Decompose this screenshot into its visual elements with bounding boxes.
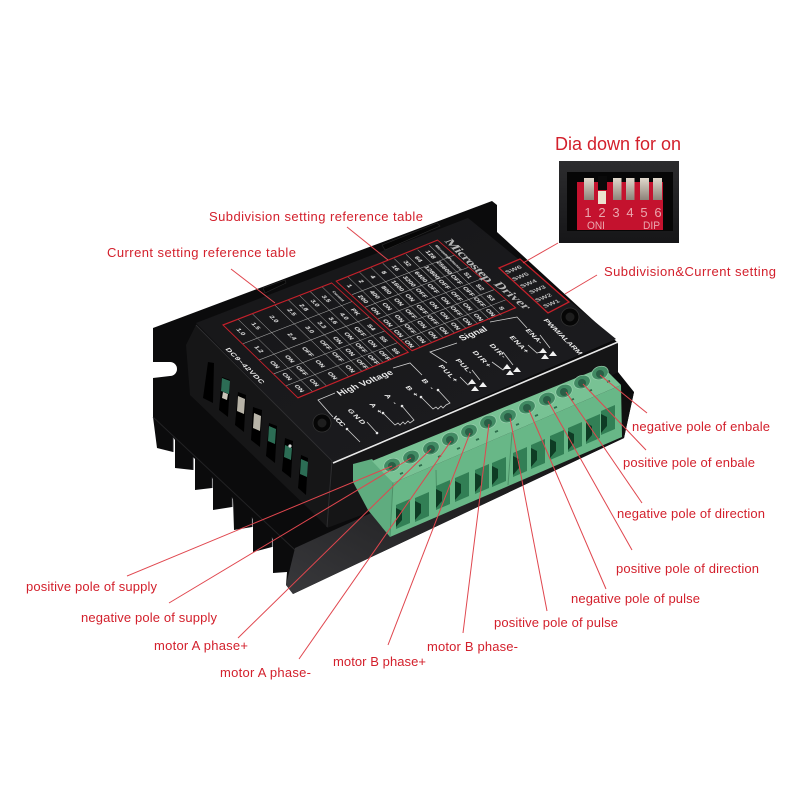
inset switch body [577, 182, 663, 230]
subdivision table values: 400 [367, 290, 381, 300]
subdivision table values: 6400 [413, 271, 428, 284]
current table values: OFF [352, 326, 367, 338]
subdivision table values: ON [381, 319, 393, 328]
top face [196, 218, 616, 462]
leader: positive pole of enable [583, 384, 646, 450]
current table values: OFF [354, 359, 369, 370]
subdivision table values: ON [392, 329, 404, 338]
A and B labels: B - [419, 378, 437, 391]
leader: positive pole of pulse [510, 418, 547, 611]
leader: negative pole of pulse [529, 410, 606, 589]
current table values: 3.6 [326, 317, 338, 326]
subdivision table values: ON [448, 322, 460, 331]
dip names: SW3 [528, 285, 548, 295]
current table values: 3.3 [315, 321, 327, 330]
subdivision table values: OFF [414, 304, 429, 316]
subdivision table outline [335, 238, 518, 352]
subdivision table values: OFF [413, 288, 428, 299]
subdivision table values: ON [392, 315, 404, 323]
subdivision table values: 1600 [389, 280, 405, 293]
switch numbers: 6 [654, 205, 662, 220]
subdivision table values: 32 [401, 260, 412, 268]
leader: dip inset [523, 243, 558, 263]
title: Driver: Driver [490, 280, 535, 311]
current table values: ON [280, 373, 292, 381]
subdivision table values: OFF [449, 291, 463, 302]
leader: motor A phase+ [238, 449, 431, 638]
current table values: OFF [330, 352, 344, 363]
current table values: 2.4 [285, 333, 297, 342]
heat sink silhouette with fins [153, 201, 634, 594]
current table values: OFF [365, 355, 380, 366]
current table values: PK [349, 308, 361, 317]
heading: dip direction: Dia down for on [555, 134, 681, 154]
subdivision table values: ON [438, 312, 449, 320]
subdivision table values: ON [392, 298, 404, 307]
optocoupler arrows [468, 348, 557, 391]
label: negative pole of enable: negative pole of enbale [632, 419, 770, 434]
label: negative pole of direction: negative pole of direction [617, 506, 765, 521]
subdivision table values: 1 [345, 284, 353, 289]
block left side [353, 459, 393, 537]
bottom mounting plate [286, 392, 634, 594]
label: motor B phase-: motor B phase- [427, 639, 518, 654]
subdivision table values: OFF [448, 306, 463, 317]
current table values: OFF [377, 350, 391, 362]
subdivision table values: 8 [379, 271, 388, 276]
block top [372, 367, 621, 483]
current table values: S5 [377, 336, 389, 344]
subdivision table values [341, 244, 507, 349]
leader: motor A phase- [299, 441, 451, 659]
subdivision table grid [338, 240, 516, 351]
A and B labels: A + [367, 402, 385, 414]
signal terminal print [430, 317, 585, 391]
current table values: 1.2 [252, 346, 264, 354]
fin shading [153, 417, 295, 550]
subdivision table values: S1 [462, 272, 473, 280]
subdivision table values: ON [437, 327, 449, 335]
alarm label: PWM/ALARM [541, 318, 585, 356]
dip names: SW4 [519, 279, 539, 289]
side wall [186, 325, 333, 527]
current setting table [223, 282, 410, 398]
subdivision table values: ON [472, 313, 484, 322]
current table values: ON [283, 355, 295, 364]
subdivision table values: S3 [485, 294, 496, 302]
subdivision table values: ON [439, 297, 451, 305]
title: Microstep: Microstep [442, 237, 497, 284]
subdivision table values: OFF [425, 284, 440, 295]
subdivision table values: ON [369, 307, 381, 316]
ON label: ONI [587, 220, 605, 232]
subdivision table values: ON [380, 303, 392, 311]
A and B labels: B + [403, 385, 421, 397]
label: negative pole of pulse: negative pole of pulse [571, 591, 700, 606]
block front [390, 385, 622, 537]
subdivision table values: ON [414, 336, 426, 344]
signal labels [436, 328, 546, 383]
leader: motor B phase+ [388, 433, 470, 645]
label: negative pole of supply: negative pole of supply [81, 610, 218, 625]
current table values: ON [343, 348, 355, 357]
VCC GND labels [330, 408, 368, 428]
leader: motor B phase- [463, 424, 489, 633]
leader: current table [231, 269, 275, 303]
VCC GND labels: GND [345, 408, 368, 425]
side edge highlight [196, 325, 332, 527]
subdivision table values: 25600 [434, 261, 453, 276]
green terminal block [353, 364, 622, 537]
switch numbers: 1 [584, 205, 592, 220]
signal labels: DIR- [487, 343, 509, 359]
top face edge highlight [333, 342, 618, 463]
subdivision table values: 200 [356, 295, 369, 305]
switch numbers [584, 205, 662, 220]
current table values: OFF [300, 347, 314, 358]
current table values: ON [307, 379, 319, 387]
label: positive pole of direction: positive pole of direction [616, 561, 759, 576]
current table values: OFF [353, 343, 368, 354]
subdivision table values: 64 [413, 256, 423, 264]
label: motor B phase+: motor B phase+ [333, 654, 426, 669]
current table values: 3.0 [303, 326, 315, 335]
driver module body [153, 201, 634, 594]
current table values: 1.5 [249, 322, 261, 331]
current table grid [223, 282, 410, 398]
slider slot 2 [598, 176, 607, 190]
subdivision table values: Microstep [434, 245, 452, 260]
label: current table: Current setting reference table [107, 245, 296, 260]
wiring symbols [348, 390, 450, 442]
signal labels: ENA+ [507, 335, 531, 354]
current table values: ON [313, 360, 325, 369]
label: subdivision table: Subdivision setting reference table [209, 209, 423, 224]
subdivision table values: 800 [379, 286, 393, 296]
dip names [504, 265, 562, 309]
label: positive pole of enable: positive pole of enbale [623, 455, 755, 470]
signal labels: PUL- [453, 358, 476, 375]
signal labels: DIR+ [470, 350, 494, 368]
label: subdivision and current setting: Subdivision&Current setting [604, 264, 776, 279]
dip switch labels [499, 259, 569, 313]
switch numbers: 3 [612, 205, 620, 220]
signal labels: PUL+ [436, 364, 460, 383]
switch numbers: 5 [640, 205, 648, 220]
dip names: SW5 [511, 272, 531, 282]
switch numbers: 2 [598, 205, 606, 220]
subdivision table values: ON [403, 294, 415, 302]
current table values: 2.5 [285, 308, 297, 317]
subdivision table values: 12800 [422, 265, 441, 281]
VCC GND labels: VCC [330, 415, 348, 428]
vent slots in side wall [203, 362, 308, 495]
leader: subdivision table [347, 227, 388, 260]
subdivision table values: OFF [402, 324, 416, 335]
A and B labels: A - [382, 393, 400, 406]
printed module title [442, 237, 535, 311]
leader: positive pole of direction [548, 401, 632, 550]
subdivision table values: OFF [472, 297, 486, 308]
current table values: 2.0 [267, 315, 279, 324]
subdivision table values: 2 [356, 280, 364, 285]
switch numbers: 4 [626, 205, 634, 220]
subdivision table values: ON [427, 301, 439, 310]
voltage print: DC9~42VDC [223, 347, 267, 385]
leader lines [127, 227, 647, 659]
current table values: OFF [294, 366, 308, 377]
subdivision table values: Pulse/rev [447, 257, 463, 271]
current table values: ON [343, 365, 355, 374]
signal labels: ENA- [523, 328, 546, 345]
subdivision table values: ON [484, 309, 496, 317]
subdivision table values: S [497, 306, 505, 311]
dip names: SW1 [542, 299, 562, 309]
subdivision table values: OFF [425, 315, 440, 326]
block seams [390, 433, 512, 537]
small block markings [400, 381, 610, 474]
dip names: SW6 [504, 265, 524, 275]
leader: positive pole of supply [127, 466, 392, 576]
front recess wall [327, 343, 618, 528]
dip outline [499, 259, 569, 313]
high voltage bracket [318, 363, 422, 417]
subdivision table values: OFF [449, 275, 463, 286]
subdivision table values: 128 [423, 250, 437, 260]
subdivision table values: ON [403, 340, 415, 349]
current table values: OFF [318, 340, 332, 351]
current table values [234, 290, 402, 395]
subdivision table values: ON [460, 318, 472, 326]
current table values: ON [331, 336, 343, 345]
subdivision setting table [335, 238, 518, 352]
subdivision table values: ON [426, 331, 438, 340]
leader: negative pole of enable [600, 375, 647, 413]
dip names: SW2 [534, 293, 554, 303]
subdivision table values: 16 [389, 265, 400, 272]
wiring dots [346, 389, 439, 434]
high voltage heading: High Voltage [335, 368, 395, 397]
current table outline [223, 282, 410, 398]
subdivision table values: S2 [474, 284, 485, 292]
current table values: S6 [390, 348, 401, 356]
current table values: ON [342, 332, 354, 341]
current table values: ON [325, 372, 337, 380]
leader: subdivision and current setting [565, 275, 597, 294]
inset frame [559, 161, 679, 243]
sliders [584, 178, 662, 204]
A and B labels [367, 378, 437, 414]
current table values: ON [366, 340, 377, 348]
current table values: 2.8 [297, 304, 309, 312]
current table values: 4.0 [338, 312, 350, 321]
mounting screw right [561, 308, 579, 326]
mounting screw left [313, 414, 331, 432]
signal bracket [430, 317, 527, 363]
current table values: 3.0 [308, 299, 320, 308]
label: motor A phase-: motor A phase- [220, 665, 311, 680]
inset window [567, 172, 673, 231]
dip switch inset photo [559, 161, 679, 243]
current table values: ON [292, 384, 304, 393]
optocoupler wiring [460, 335, 550, 385]
subdivision table values: OFF [437, 279, 451, 290]
subdivision table values: OFF [403, 309, 418, 320]
signal heading: Signal [457, 325, 489, 342]
current table values: S4 [365, 324, 376, 332]
subdivision table values: 3200 [401, 276, 416, 288]
rear tabs [382, 223, 440, 250]
current table values: 1.0 [234, 328, 246, 337]
high voltage terminal print [318, 363, 450, 442]
wire openings [396, 405, 615, 529]
rear tab left [263, 280, 286, 293]
current table values: 3.5 [320, 295, 332, 304]
subdivision table values: 4 [368, 275, 376, 280]
leader: negative pole of direction [566, 392, 642, 503]
DIP label: DIP [643, 220, 660, 232]
leader: negative pole of supply [169, 458, 411, 603]
current table values: Current [331, 290, 346, 302]
screw holes [382, 364, 610, 474]
label: positive pole of pulse: positive pole of pulse [494, 615, 618, 630]
label: positive pole of supply: positive pole of supply [26, 579, 158, 594]
label: motor A phase+: motor A phase+ [154, 638, 248, 653]
subdivision table values: ON [415, 320, 427, 329]
subdivision table values: OFF [461, 286, 475, 298]
subdivision table values: ON [461, 303, 473, 311]
current table values: ON [268, 361, 280, 369]
